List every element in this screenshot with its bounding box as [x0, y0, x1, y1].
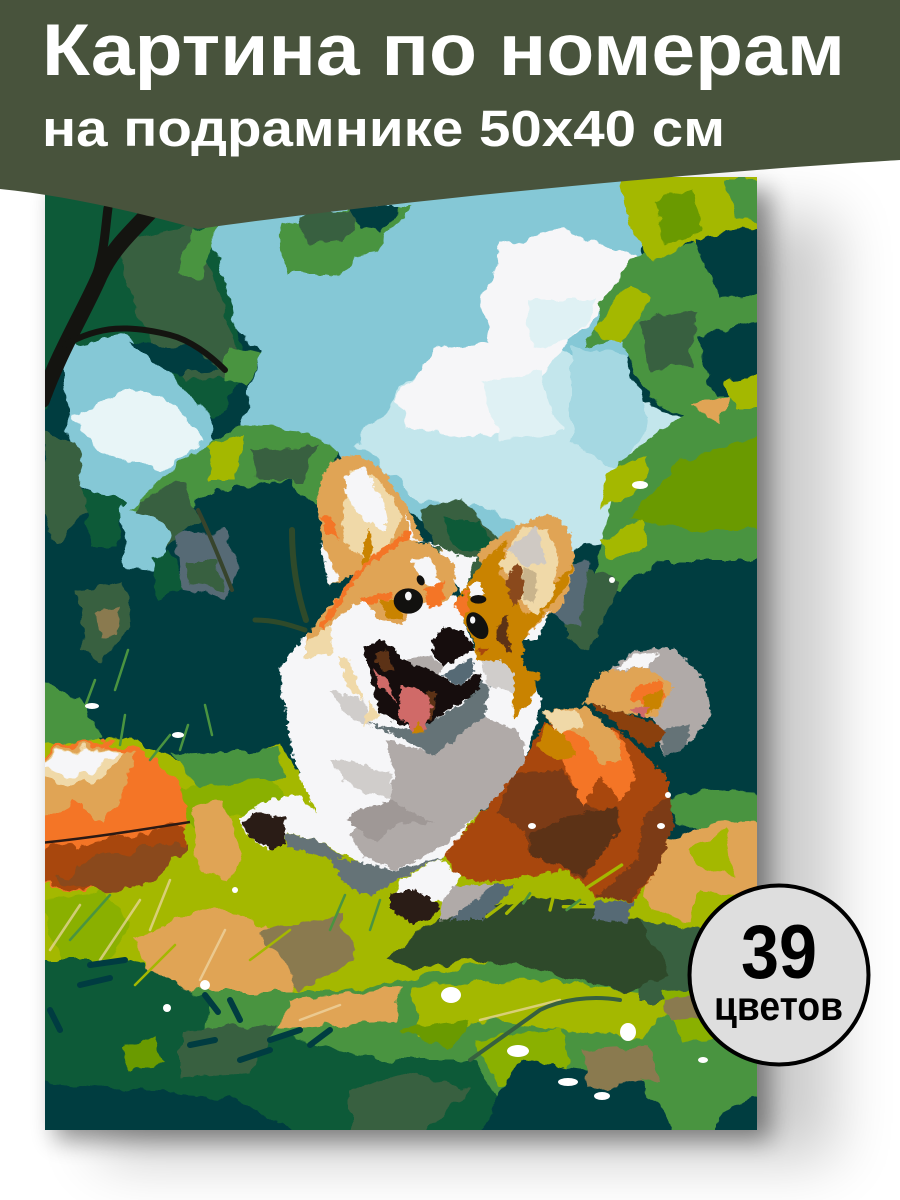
shadow under the dog	[385, 895, 670, 992]
top-left foliage	[45, 195, 262, 419]
subtitle: на подрамнике 50х40 см	[42, 100, 725, 157]
rear body	[443, 707, 673, 902]
right-side bushes at grass horizon	[670, 788, 757, 830]
grass blades	[50, 650, 625, 1060]
ball	[45, 738, 190, 894]
header banner	[0, 0, 900, 229]
forest behind the dog	[420, 498, 498, 582]
badge number: 39	[741, 910, 817, 995]
tail	[583, 648, 712, 757]
left forest	[40, 425, 340, 750]
top-right foliage	[585, 177, 757, 416]
ball seam	[40, 822, 190, 843]
badge: 39 colours	[690, 886, 868, 1064]
tree trunk and branches	[42, 208, 306, 630]
face markings	[305, 528, 443, 660]
sky	[211, 182, 642, 552]
badge label: цветов	[714, 983, 843, 1029]
painting: corgi with ball on a meadow	[45, 177, 757, 1130]
hanging foliage	[280, 205, 410, 275]
front legs and paws	[240, 795, 633, 923]
painted landscape background	[20, 160, 780, 1150]
eyes and brows	[394, 575, 488, 639]
grey chest shading	[330, 653, 527, 897]
nose and snout	[397, 627, 475, 687]
canvas shadow	[55, 190, 835, 1160]
grass over the paw	[487, 865, 622, 917]
white flower dots	[85, 481, 708, 1100]
chest and head fur	[278, 597, 542, 880]
title: Картина по номерам	[42, 10, 845, 91]
clouds	[70, 230, 690, 565]
left ear	[317, 456, 477, 597]
open mouth with tongue	[363, 640, 480, 733]
corgi	[240, 456, 712, 923]
right tree	[552, 374, 757, 650]
muzzle-top face patch	[305, 543, 457, 660]
right ear	[455, 515, 574, 720]
meadow	[30, 735, 770, 1150]
